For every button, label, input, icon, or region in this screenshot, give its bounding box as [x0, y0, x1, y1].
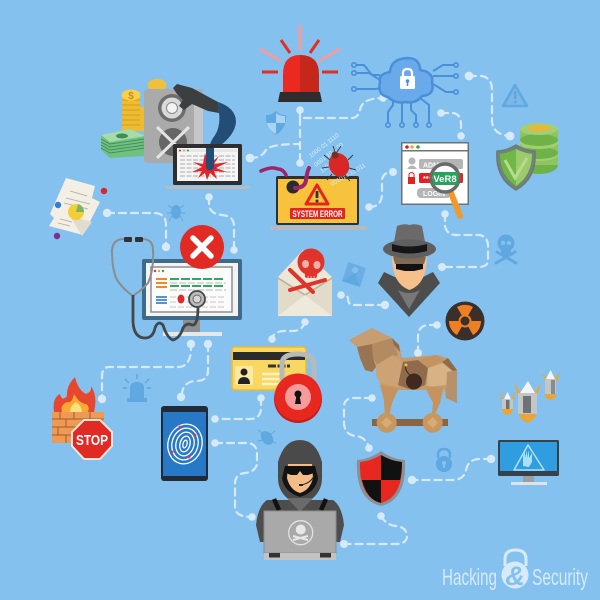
icon: smartphone with fingerprint	[161, 406, 208, 481]
connector dots	[98, 72, 514, 548]
icon: hat spy in trench coat	[378, 224, 440, 317]
icon: red siren	[260, 25, 340, 102]
icon: faint envelope	[342, 262, 366, 287]
icon: infected document	[49, 178, 107, 239]
icon: bombs	[500, 370, 560, 423]
icon: red and black shield	[357, 451, 405, 506]
icon: credit card with red padlock	[232, 347, 322, 423]
dashed connector paths	[102, 76, 510, 544]
icon: login browser with magnifier: ***	[423, 176, 431, 183]
icon: faint bug bottom	[258, 429, 276, 447]
icon: faint shield	[266, 111, 286, 135]
logo: Hacking & Security: &	[505, 561, 525, 591]
icon: faint bug top	[167, 205, 185, 221]
icon: login browser with magnifier	[401, 142, 469, 216]
icon: radiation symbol	[446, 302, 484, 340]
icon: system error laptop: 001010 11 011	[330, 163, 367, 188]
icon: firewall with flames and stop sign	[52, 377, 112, 459]
icon: faint skull and crossbones	[496, 234, 516, 263]
icon: database with green shield	[497, 123, 558, 190]
logo: Hacking & Security: Hacking	[442, 564, 497, 590]
icon: login browser with magnifier: LOGIN	[423, 191, 445, 198]
icon: faint alarm	[123, 374, 151, 402]
icon: monitor with stop hand	[498, 440, 559, 485]
icon: system error laptop: 0001 10 1 00	[314, 142, 345, 169]
icon: hacker with laptop	[256, 440, 344, 560]
icon: safe with dollars and stolen data: $	[128, 91, 134, 102]
icon: safe with dollars and stolen data	[101, 79, 250, 189]
icon: monitor diagnostic with stethoscope	[112, 225, 242, 340]
icon: system error laptop: 110 010	[320, 156, 340, 175]
icon: faint warning triangle	[503, 85, 527, 106]
logo: Hacking & Security	[442, 550, 588, 591]
icon: firewall with flames and stop sign: STOP	[76, 432, 108, 449]
icon: system error laptop	[261, 132, 368, 230]
icon: system error laptop: SYSTEM ERROR	[292, 209, 343, 220]
icon: trojan horse	[349, 328, 457, 433]
icon: system error laptop: 1000 01 1110	[309, 132, 341, 160]
icon: faint padlock	[436, 449, 452, 472]
icon: cloud network lock	[352, 58, 458, 127]
icon: login browser with magnifier: ADMIN	[423, 162, 446, 170]
icon: spam envelope with skull	[278, 248, 332, 316]
icon: login browser with magnifier: VeR8	[433, 174, 457, 185]
